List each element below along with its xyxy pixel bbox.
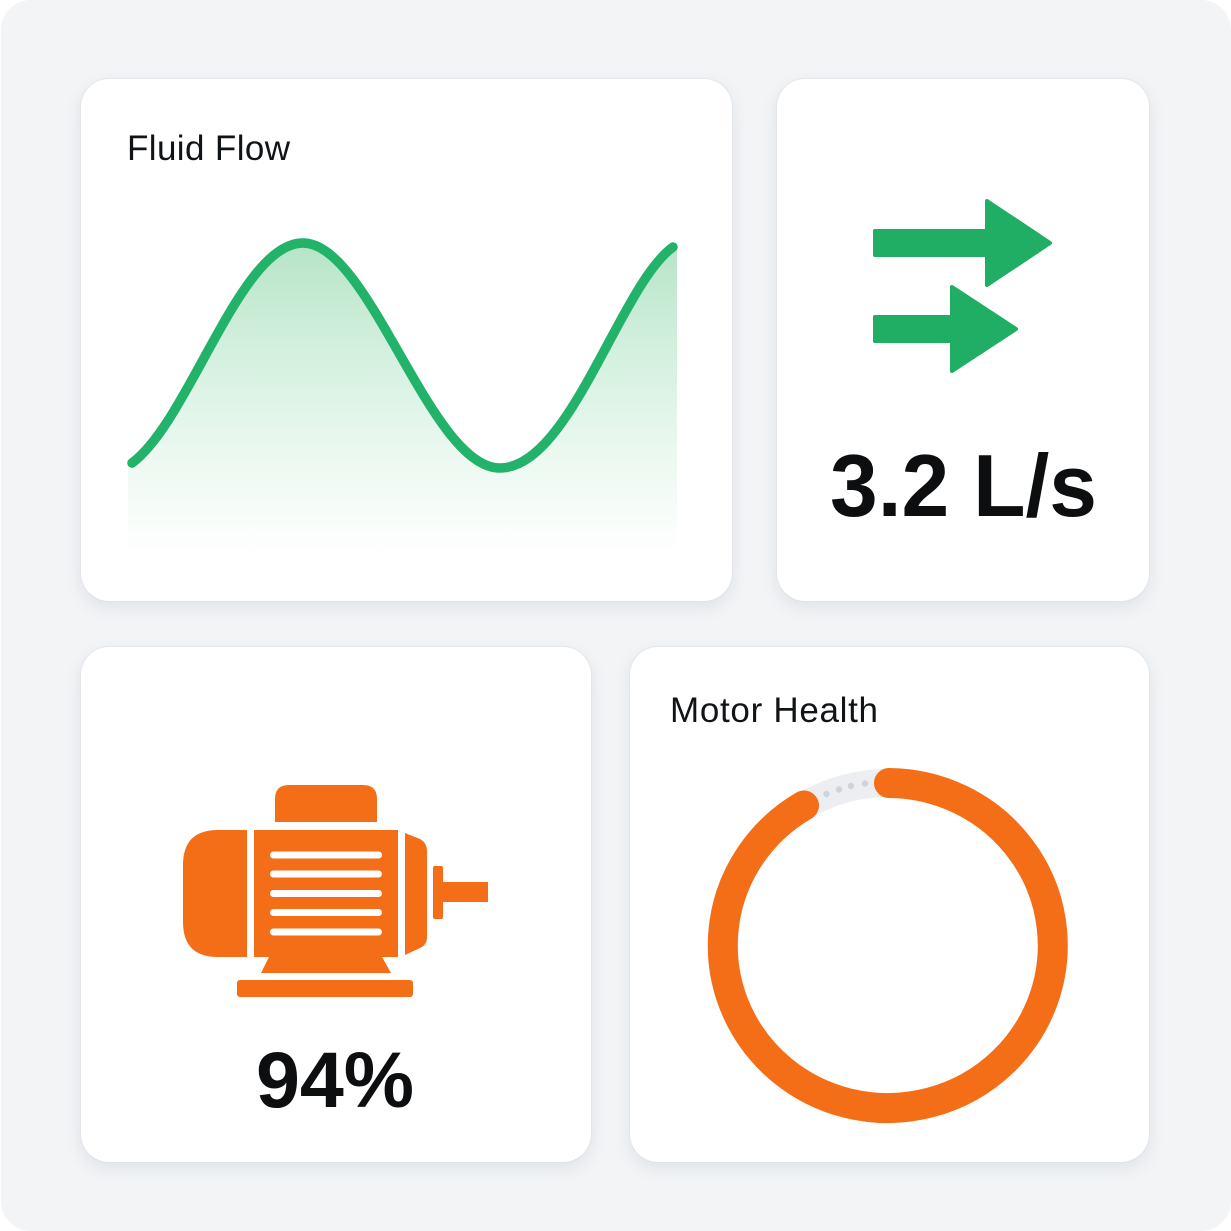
value: motor percentage: 94% (256, 1035, 414, 1124)
panel: fluid flow card (81, 79, 732, 601)
value: flow rate: 3.2 L/s (830, 436, 1097, 535)
terminal box (275, 785, 377, 822)
mounting foot (261, 957, 391, 973)
panel: flow rate card (777, 79, 1149, 601)
shaft (443, 882, 488, 902)
upper arrow (875, 201, 1050, 285)
rear cap (183, 830, 247, 957)
motor body with cooling fins (254, 830, 398, 957)
front bell (405, 833, 427, 955)
gauge remaining dots (823, 780, 868, 797)
chart area fill (128, 243, 677, 555)
area chart: fluid flow (128, 243, 677, 555)
donut gauge: motor health (723, 780, 1053, 1108)
icon: electric motor (183, 785, 488, 997)
gauge value arc (723, 783, 1053, 1108)
panel: motor health card (630, 647, 1149, 1162)
heading: Fluid Flow: Fluid Flow (127, 129, 291, 168)
lower arrow (875, 287, 1016, 371)
panel: motor efficiency card (81, 647, 591, 1162)
base plate (237, 980, 413, 997)
gauge track (724, 783, 1052, 1108)
heading: Motor Health: Motor Health (670, 691, 878, 730)
shaft flange (433, 866, 443, 919)
chart line (132, 243, 673, 468)
icon: flow arrows (875, 201, 1050, 371)
